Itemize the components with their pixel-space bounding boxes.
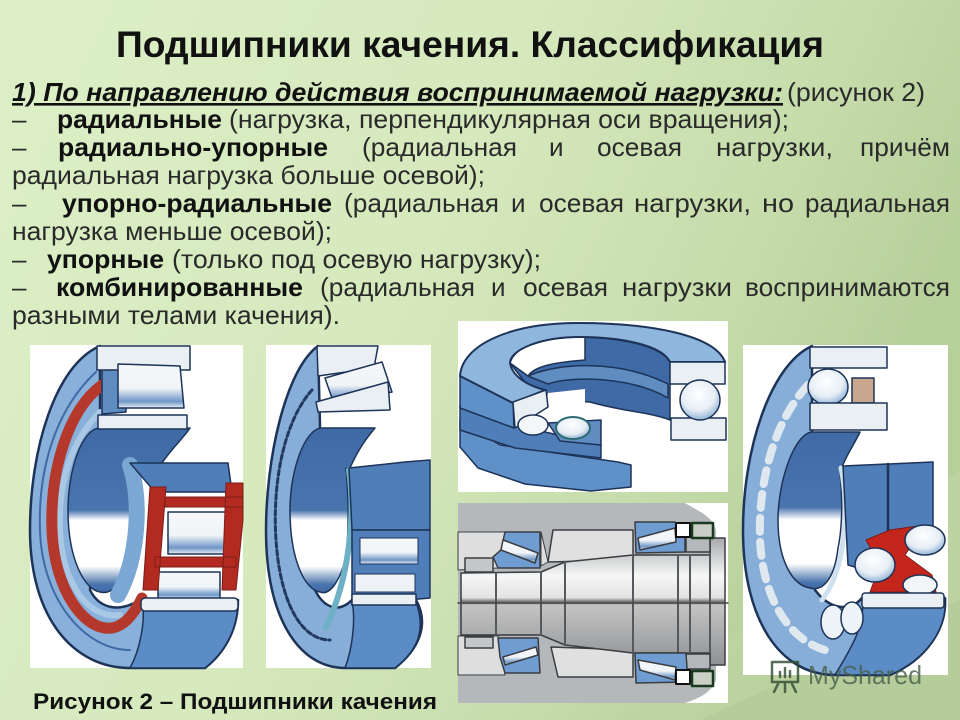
item: thrust: –	[12, 244, 27, 274]
figure: cylindrical roller bearing	[30, 345, 243, 668]
red cage	[866, 525, 936, 592]
item: combined: (радиальная	[320, 272, 475, 302]
lower washer	[460, 420, 631, 491]
outer ring body	[743, 346, 945, 675]
item: combined: осевая	[523, 272, 608, 302]
outer and inner rings	[30, 346, 238, 668]
item: combined: воспринимаются	[745, 272, 950, 302]
item: thrust: упорные	[47, 244, 164, 274]
figure: tapered roller bearing	[266, 345, 431, 668]
top sections	[810, 347, 887, 368]
inner ring	[326, 470, 351, 628]
item: combined: –	[12, 272, 27, 302]
inner wall	[510, 337, 670, 420]
rings	[266, 346, 422, 668]
item: angular contact thrust: упорно-радиальные	[62, 188, 332, 218]
title: Подшипники качения. Классификация	[116, 24, 824, 65]
middle washer	[460, 405, 601, 458]
item: angular contact radial: (радиальная	[362, 132, 517, 162]
item: combined: нагрузки	[622, 272, 732, 302]
item: combined	[12, 272, 950, 330]
item: angular contact radial: и	[549, 132, 564, 162]
item: angular contact radial: нагрузки,	[716, 132, 833, 162]
text block: classification by load direction	[12, 77, 950, 330]
shaft	[461, 538, 725, 665]
figure: thrust ball bearing	[458, 321, 728, 492]
seals	[676, 523, 690, 537]
item: angular contact thrust: нагрузки,	[634, 188, 751, 218]
item: angular contact radial	[12, 132, 950, 190]
subheading: 1) По направлению действия воспринимаемой нагрузки:	[12, 77, 783, 107]
item: thrust	[12, 244, 541, 274]
cage block	[548, 420, 601, 445]
item: thrust: (только под осевую нагрузку);	[172, 244, 541, 274]
watermark	[772, 660, 922, 692]
item: combined: и	[491, 272, 506, 302]
caption: Рисунок 2 – Подшипники качения	[33, 689, 437, 714]
top ring sections	[97, 346, 190, 370]
figure reference: (рисунок 2)	[787, 77, 925, 107]
item: angular contact radial: причём	[860, 132, 950, 162]
figure: self-aligning ball bearing	[743, 345, 948, 675]
white race sections	[670, 362, 725, 384]
item: angular contact radial: –	[12, 132, 27, 162]
hole	[68, 428, 190, 592]
item: radial: радиальные	[57, 104, 222, 134]
bearing collars	[686, 537, 710, 552]
red cage section	[143, 483, 243, 590]
balls	[680, 380, 720, 420]
balls	[905, 525, 945, 555]
item: angular contact thrust: осевая	[539, 188, 624, 218]
white roller	[168, 512, 230, 554]
left bearings	[493, 532, 540, 568]
item: angular contact thrust: но	[762, 188, 794, 218]
icon: presentation screen	[772, 662, 798, 692]
item: angular contact thrust: –	[12, 188, 27, 218]
item: radial: –	[12, 104, 27, 134]
item: angular contact thrust: радиальная	[805, 188, 950, 218]
watermark: MyShared	[808, 660, 922, 690]
inner ring section	[118, 465, 137, 595]
section block	[349, 460, 430, 530]
item: radial: (нагрузка, перпендикулярная оси вращения);	[229, 104, 789, 134]
ring section behind roller	[102, 366, 126, 414]
item: angular contact radial: радиально-упорные	[58, 132, 328, 162]
item: angular contact thrust: (радиальная	[344, 188, 499, 218]
item: angular contact thrust: нагрузка меньше осевой);	[12, 216, 332, 246]
right bearings	[635, 522, 685, 553]
red cage arc	[52, 385, 142, 628]
item: angular contact thrust	[12, 188, 950, 246]
figure: shaft with tapered bearings	[458, 503, 728, 703]
housing	[458, 503, 716, 703]
hole	[290, 428, 375, 593]
top section	[317, 346, 378, 376]
item: angular contact radial: осевая	[597, 132, 682, 162]
top disc	[460, 323, 725, 403]
top washer side	[460, 376, 514, 428]
thread	[465, 558, 493, 572]
item: angular contact thrust: и	[511, 188, 526, 218]
item: combined: комбинированные	[56, 272, 303, 302]
hole	[778, 432, 860, 589]
item: angular contact radial: радиальная нагрузка больше осевой);	[12, 160, 485, 190]
section	[843, 462, 933, 570]
item: combined: разными телами качения).	[12, 300, 340, 330]
